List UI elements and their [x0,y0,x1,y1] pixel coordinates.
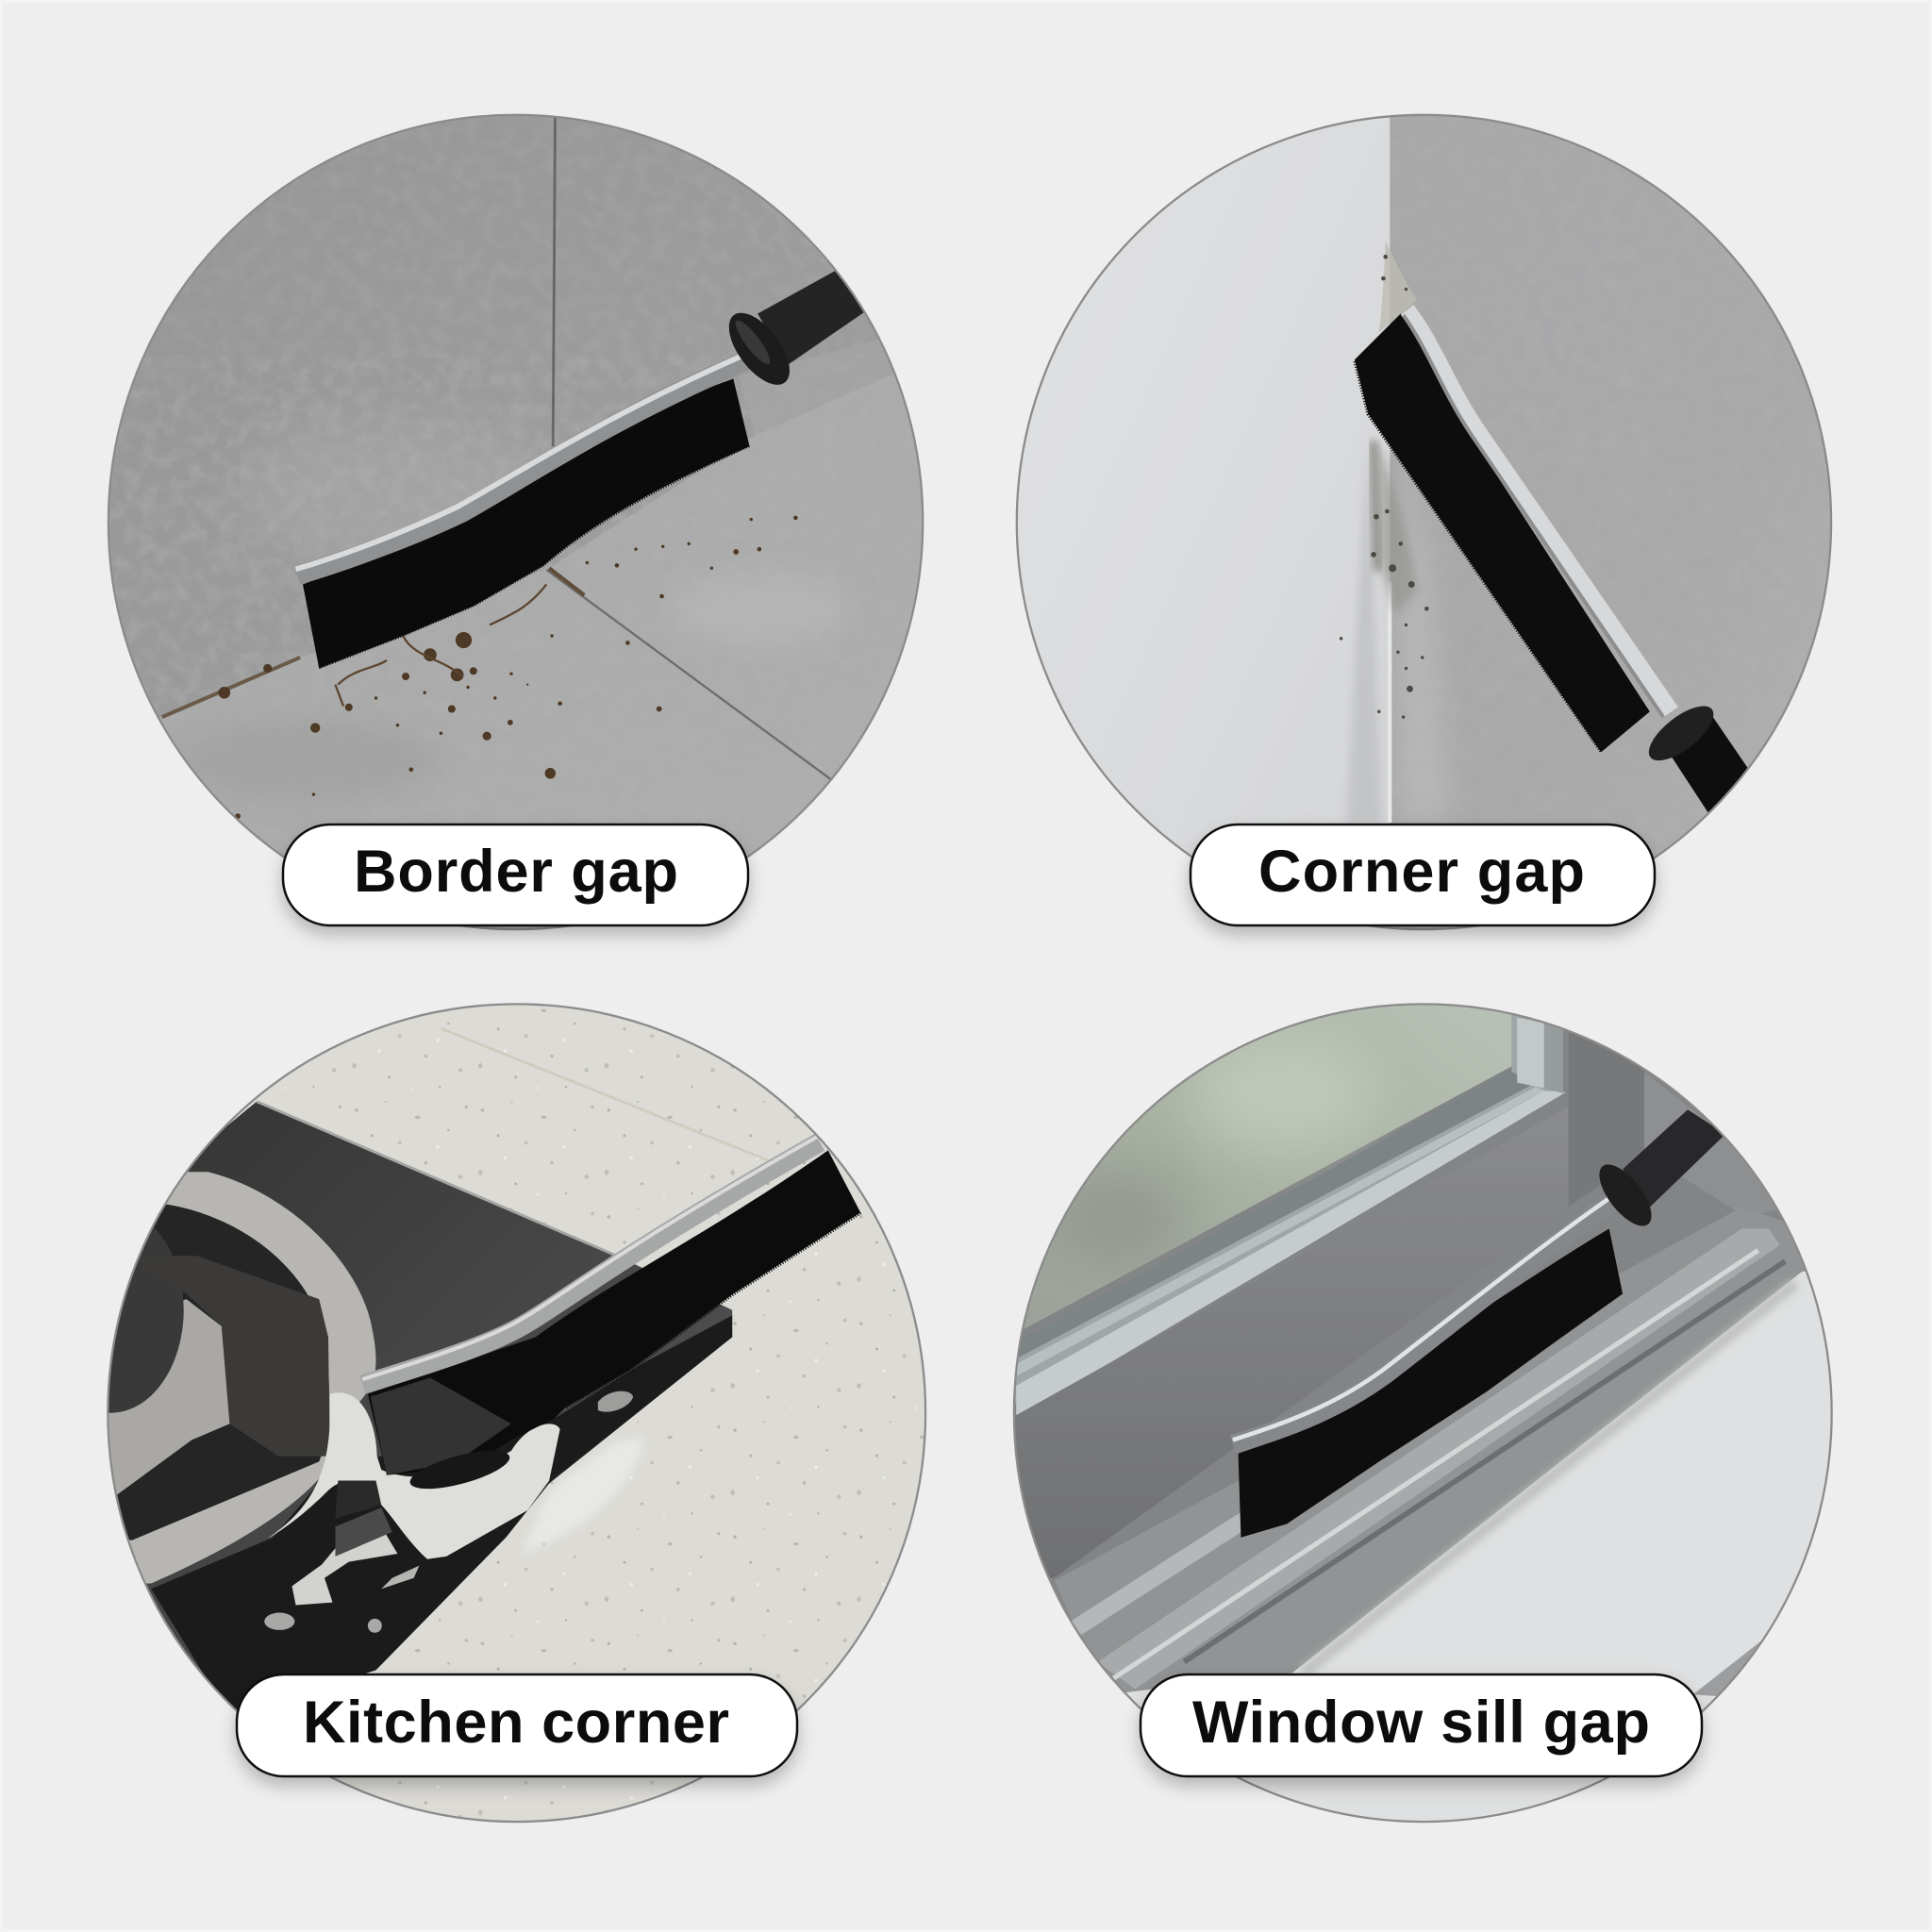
window panel [990,1107,1569,1581]
window glass [990,980,1511,1348]
brush bristles [1355,313,1650,752]
photo: brush cleaning a window track [990,980,1877,1868]
black glass foreground [151,1315,732,1716]
brush handle [1623,1109,1725,1208]
pan support [173,1256,330,1457]
panel: corner gap [1015,113,1832,943]
photo: brush cleaning a kitchen hob edge [107,1003,926,1823]
soap smear on counter [526,1440,641,1549]
brush bristles [368,1150,860,1475]
infographic canvas [107,113,1833,1823]
label pill: kitchen corner [237,1674,797,1776]
label pill: window sill gap [1141,1674,1702,1776]
label pill: corner gap [1191,824,1655,925]
window frame [990,980,1563,1418]
hob glass [146,1102,732,1675]
photo: brush cleaning a wall corner gap [1015,113,1832,930]
label pill: kitchen corner: Kitchen corner [303,1690,729,1756]
dirt specks [218,516,798,819]
window sill [1108,1251,1877,1868]
label pill: corner gap: Corner gap [1258,839,1585,905]
steel drip plate [109,1299,230,1494]
brush bristles [1239,1229,1623,1538]
panel: kitchen corner [107,1003,926,1823]
brush handle [1672,717,1747,812]
label pill: window sill gap: Window sill gap [1192,1690,1650,1756]
steel burner ring [129,1172,375,1583]
foam [268,1392,560,1559]
dark foam patches [335,1480,381,1519]
label pill: border gap [283,824,748,925]
foam tendrils [292,1526,397,1605]
dark burner ring [117,1204,329,1541]
brush metal spine [297,358,752,575]
label pill: border gap: Border gap [354,839,678,905]
brush metal spine [1407,309,1672,711]
photo: brush cleaning a tile border gap [108,113,924,930]
track [1054,1208,1840,1706]
brush metal spine [362,1142,820,1385]
brush bristles [303,378,750,668]
brush metal spine [1233,1199,1616,1444]
grime specks [1340,255,1429,719]
brush handle [758,271,866,365]
burner cap [109,1227,184,1413]
panel: border gap [108,113,924,943]
panel: window sill gap [990,980,1877,1868]
